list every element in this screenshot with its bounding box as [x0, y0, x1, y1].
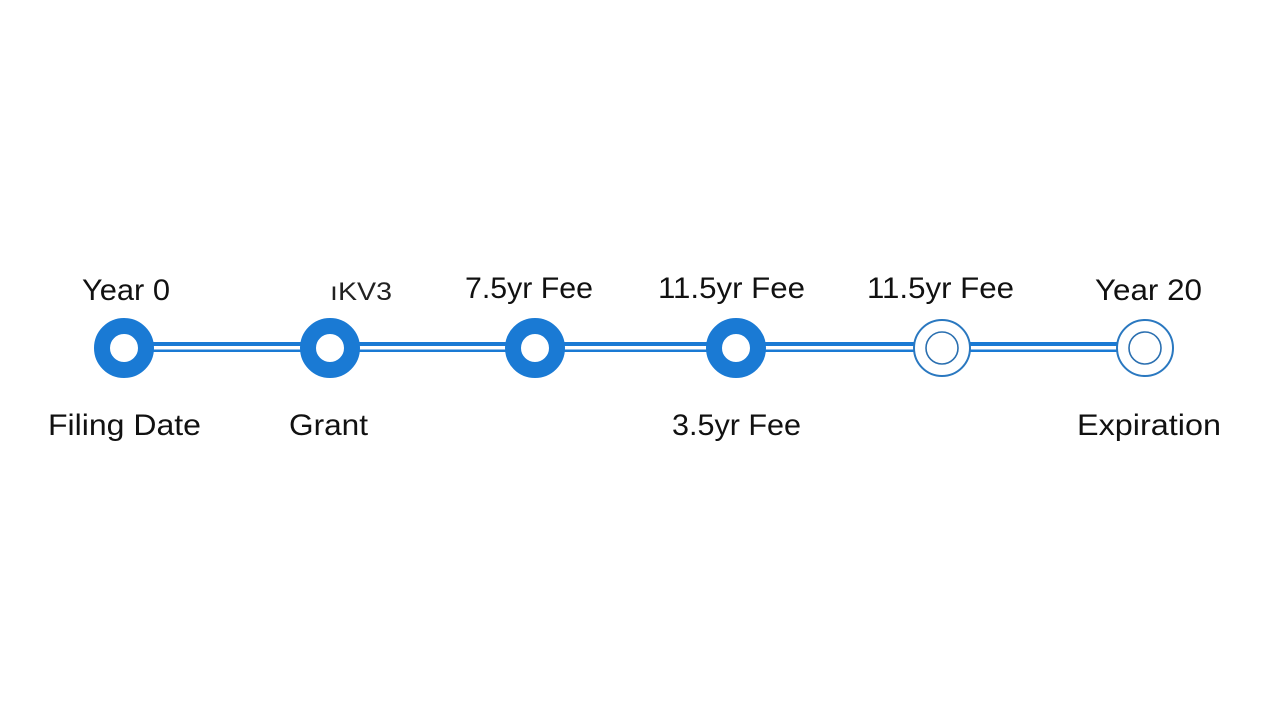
label: Grant: Grant	[289, 409, 369, 442]
label: Expiration: Expiration	[1077, 409, 1221, 442]
node: year 0	[102, 326, 146, 370]
label: 3.5yr Fee: 3.5yr Fee	[672, 409, 801, 442]
label: Year 20: Year 20	[1095, 274, 1202, 307]
node: year 20 outline	[1117, 320, 1173, 376]
node: 11.5yr / 3.5yr fee	[714, 326, 758, 370]
node: 7.5yr fee	[513, 326, 557, 370]
node: 11.5yr fee outline	[914, 320, 970, 376]
label: 7.5yr Fee: 7.5yr Fee	[465, 272, 593, 305]
label: 11.5yr Fee: 11.5yr Fee	[658, 272, 805, 305]
label: 11.5yr Fee 2: 11.5yr Fee	[867, 272, 1014, 305]
label: Year 0: Year 0	[82, 274, 170, 307]
label: garbled grant top: ıKV3	[330, 278, 392, 306]
timeline line	[124, 342, 1145, 352]
label: Filing Date: Filing Date	[48, 409, 201, 442]
node: grant	[308, 326, 352, 370]
